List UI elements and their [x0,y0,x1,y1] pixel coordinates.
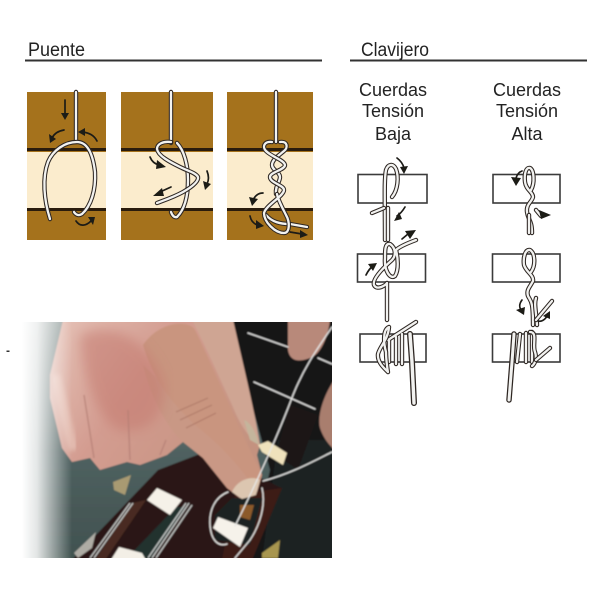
diagram: high tension step 1 [493,168,560,233]
label: Cuerdas Tensión Baja: Baja [375,124,412,144]
string: step 3 knot [264,92,307,233]
diagram: high tension step 3 [492,332,560,400]
nut [258,441,287,465]
diagram: high tension step 2 [492,250,560,325]
hand [49,322,262,475]
label: Cuerdas Tensión Alta: Tensión [496,101,558,121]
white pegs [147,488,182,515]
diagram: low tension step 1 [358,158,427,240]
right hand fingers [288,320,330,360]
diagram: low tension step 2 [358,230,426,320]
white guitar strings [210,327,332,558]
headstock [72,452,282,560]
fretboard and dark background [228,320,334,560]
label: Cuerdas Tensión Baja: Cuerdas [359,80,427,100]
label: Cuerdas Tensión Alta: Alta [511,124,543,144]
diagram: low tension step 3 [360,322,426,403]
label: Cuerdas Tensión Baja: Tensión [362,101,424,121]
tuner strings [90,503,192,558]
label: Cuerdas Tensión Alta: Cuerdas [493,80,561,100]
panel: bridge knot step 1 [27,92,106,240]
string: step 2 knot [157,92,198,217]
heading: Clavijero: Clavijero [361,40,429,61]
arrows: step 2 [150,157,211,196]
string: step 1 loop [44,92,95,219]
small mark [6,350,10,352]
heading: Puente: Puente [28,40,85,61]
left edge white fade [22,322,72,558]
photo: hands tying string at guitar headstock [20,320,334,560]
tuner hardware [113,475,131,495]
panel: bridge knot step 3 [227,92,313,240]
panel: bridge knot step 2 [121,92,213,240]
arrows: step 3 [249,193,308,238]
arrows: step 1 [49,100,97,225]
